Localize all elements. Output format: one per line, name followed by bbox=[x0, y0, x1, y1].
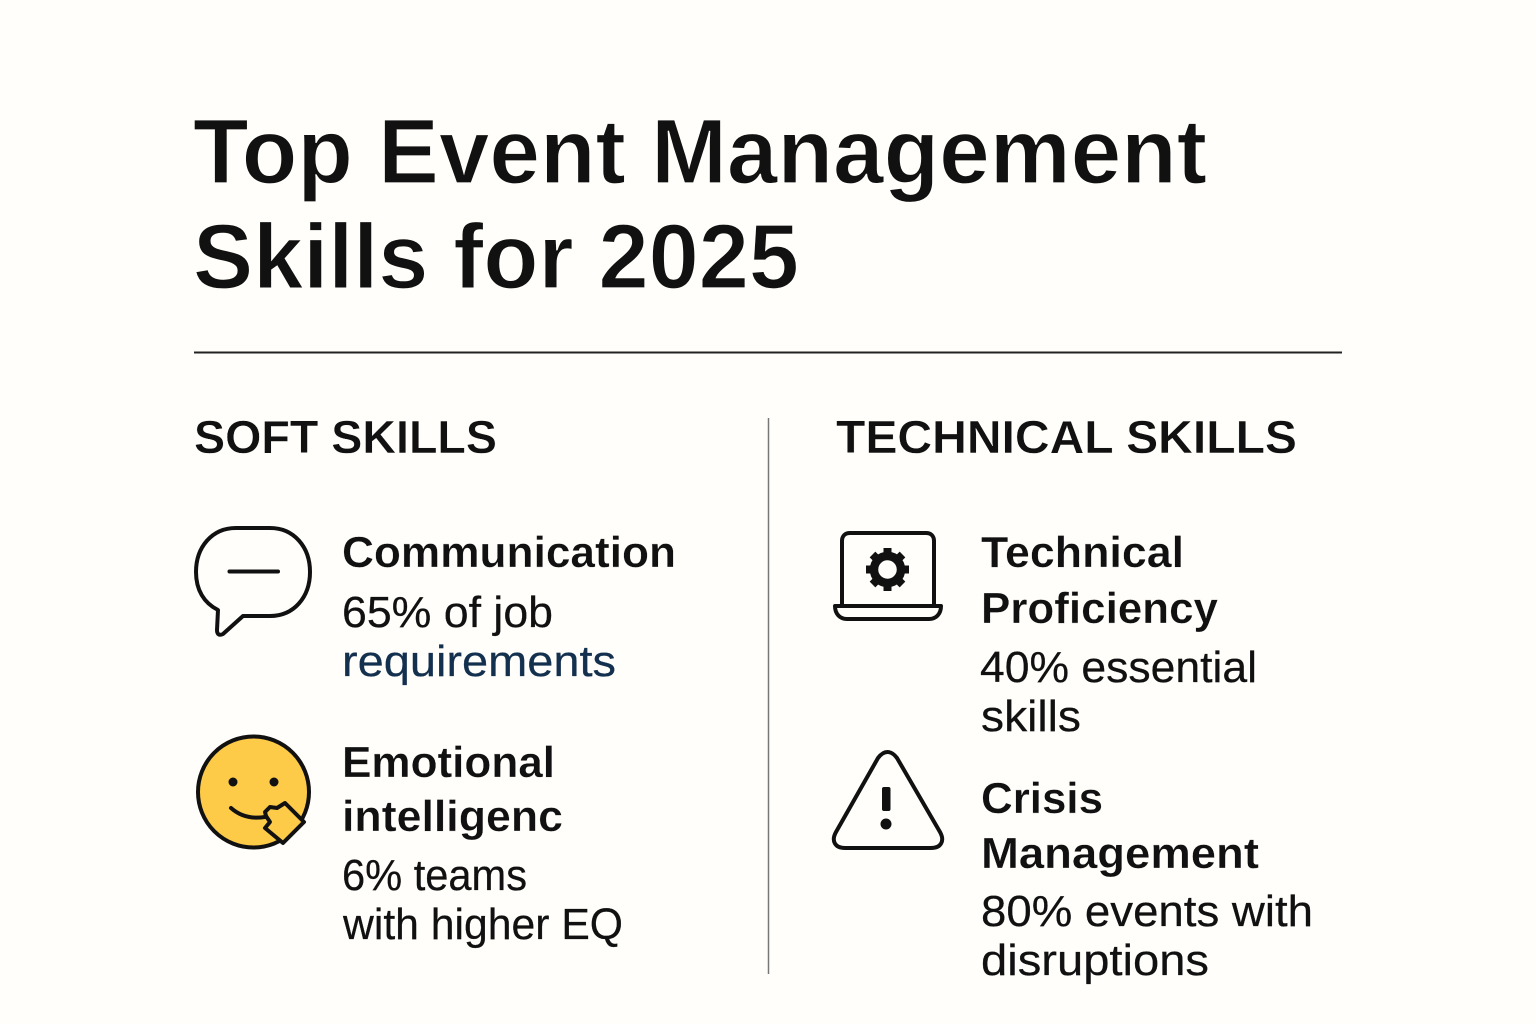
skill: communication: requirements bbox=[342, 637, 616, 686]
skill: crisis management: 80% events with bbox=[981, 887, 1313, 936]
skill: crisis management: Management bbox=[981, 829, 1259, 878]
skill: technical proficiency: skills bbox=[981, 692, 1081, 741]
skill: technical proficiency: Proficiency bbox=[981, 584, 1219, 633]
skill: crisis management: disruptions bbox=[981, 936, 1209, 985]
skill: technical proficiency: Technical bbox=[981, 528, 1184, 577]
icon: smiley with hand bbox=[198, 736, 309, 848]
skill: crisis management: Crisis bbox=[981, 774, 1103, 823]
skill: technical proficiency bbox=[980, 528, 1257, 741]
skill: communication bbox=[342, 528, 676, 686]
panel: technical skills bbox=[834, 411, 1313, 985]
icon: warning triangle bbox=[834, 752, 942, 848]
panel: soft skills bbox=[194, 411, 676, 949]
icon: laptop with gear bbox=[835, 533, 941, 619]
skill: communication: 65% of job bbox=[342, 588, 553, 637]
skill: emotional intelligence: with higher EQ bbox=[342, 900, 623, 949]
skill: emotional intelligence: Emotional bbox=[342, 738, 555, 787]
skill: communication: Communication bbox=[342, 528, 676, 577]
skill: emotional intelligence bbox=[342, 738, 623, 949]
skill: crisis management bbox=[981, 774, 1313, 985]
title: Top Event Management bbox=[193, 101, 1207, 203]
title: Skills for 2025 bbox=[193, 206, 799, 308]
heading: soft skills: SOFT SKILLS bbox=[194, 411, 497, 463]
skill: technical proficiency: 40% essential bbox=[980, 643, 1257, 692]
title bbox=[193, 101, 1207, 308]
heading: technical skills: TECHNICAL SKILLS bbox=[836, 411, 1297, 463]
icon: speech bubble bbox=[196, 528, 310, 635]
skill: emotional intelligence: 6% teams bbox=[342, 851, 527, 900]
skill: emotional intelligence: intelligenc bbox=[342, 792, 563, 841]
